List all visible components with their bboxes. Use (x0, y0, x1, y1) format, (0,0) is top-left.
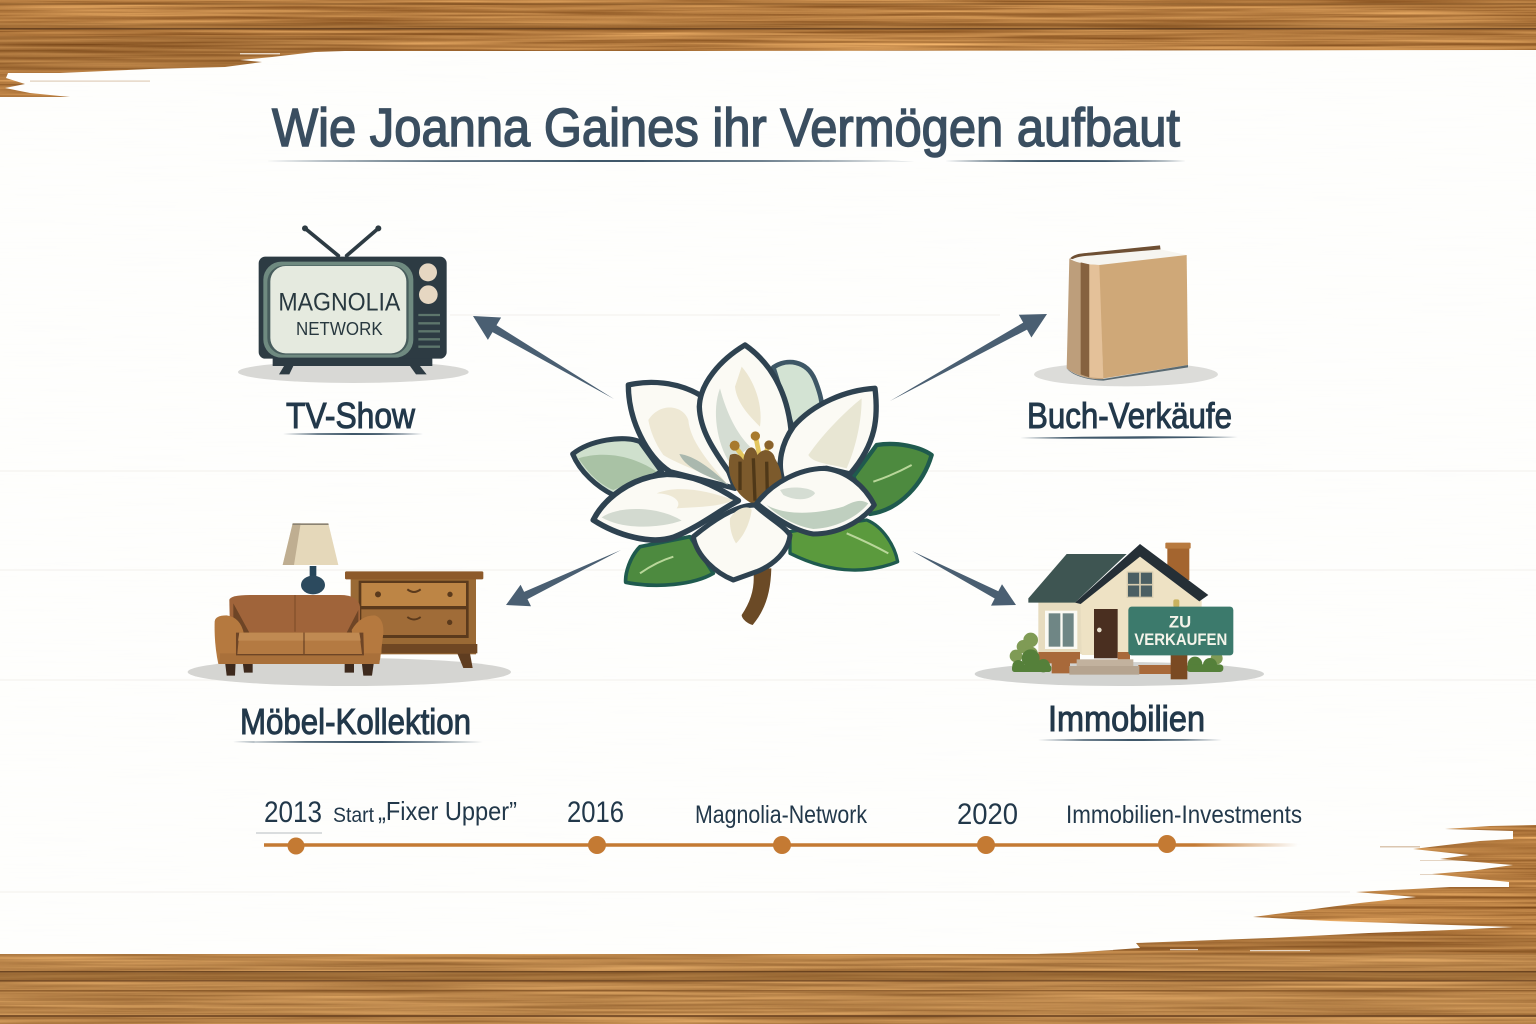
timeline label: Start: Start (333, 804, 374, 827)
arrow: to Möbel-Kollektion (506, 550, 621, 606)
icon: sofa, dresser and lamp (188, 523, 511, 686)
icon: house with for-sale sign: ZU (1169, 612, 1191, 631)
timeline label: Immobilien-Investments: Immobilien-Investments (1066, 801, 1302, 829)
marker Magnolia-Network (773, 836, 791, 854)
marker Immobilien-Investments (1158, 835, 1176, 853)
marker 2016 (588, 836, 606, 854)
title: Wie Joanna Gaines ihr Vermögen aufbaut (272, 98, 1180, 158)
arrow: to Immobilien (912, 551, 1016, 606)
icon: magnolia flower (573, 345, 932, 625)
icon: television: NETWORK (296, 318, 383, 339)
timeline label: Magnolia-Network: Magnolia-Network (695, 801, 867, 829)
icon: book (1034, 245, 1218, 386)
marker 2020 (977, 836, 995, 854)
arrow: to TV-Show (473, 316, 614, 399)
panel: TV-Show (238, 225, 469, 436)
timeline label: 2016: 2016 (567, 796, 624, 829)
timeline label: Fixer Upper: „Fixer Upper” (378, 796, 517, 826)
timeline (256, 796, 1302, 854)
timeline label: 2013: 2013 (264, 796, 322, 829)
label: Möbel-Kollektion: Möbel-Kollektion (240, 701, 471, 742)
icon: television (238, 225, 469, 383)
timeline label: 2020: 2020 (957, 798, 1018, 831)
icon: house with for-sale sign (975, 543, 1264, 686)
marker 2013 (288, 838, 304, 854)
label: Immobilien: Immobilien (1048, 698, 1205, 739)
dry-brush streaks (30, 80, 1490, 875)
label: Buch-Verkäufe: Buch-Verkäufe (1027, 395, 1232, 436)
plank seams (0, 315, 1536, 892)
label: TV-Show: TV-Show (286, 395, 416, 436)
icon: house with for-sale sign: VERKAUFEN (1134, 630, 1227, 649)
panel: Buch-Verkäufe (1020, 245, 1238, 439)
panel: Möbel-Kollektion (188, 523, 511, 743)
icon: television: MAGNOLIA (278, 290, 401, 317)
panel: Immobilien (975, 543, 1264, 741)
white streaks on wood (240, 53, 1310, 951)
arrow: to Buch-Verkäufe (890, 314, 1047, 401)
